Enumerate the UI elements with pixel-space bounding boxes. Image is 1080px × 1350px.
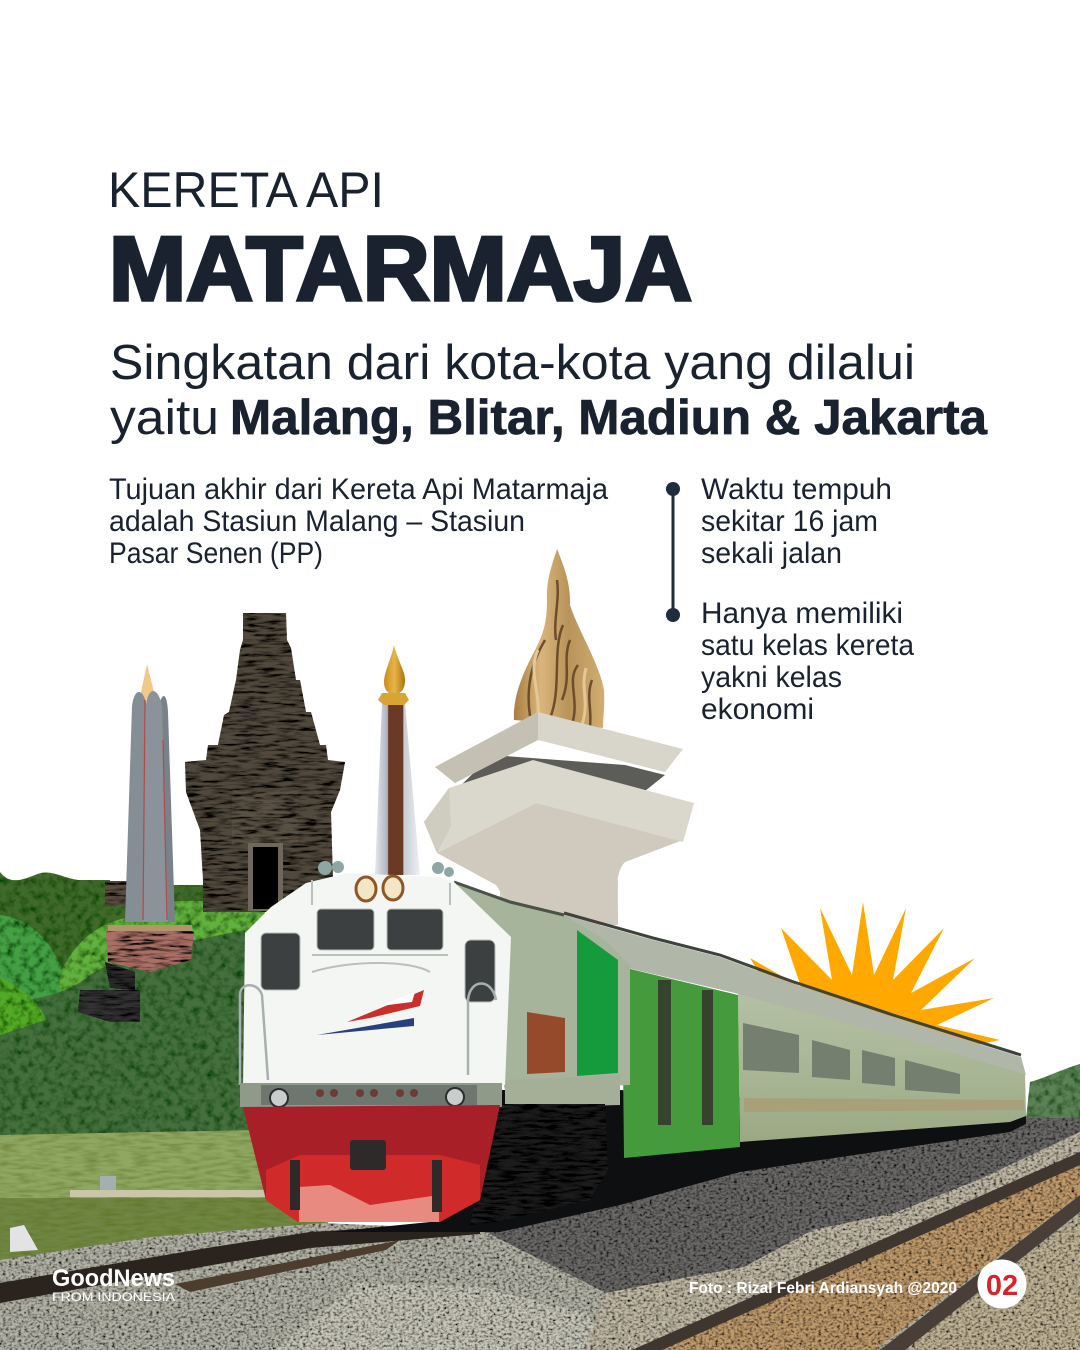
carriage stripe (744, 1098, 1024, 1112)
subtitle text block: yaitu (110, 391, 219, 445)
light ballast (585, 1132, 1080, 1350)
carriage doors (658, 980, 713, 1125)
text block: travel time: sekali jalan (701, 537, 842, 570)
forest hills left (0, 872, 265, 1150)
text block: class: Hanya memiliki (701, 597, 903, 630)
roof edge (564, 913, 1021, 1055)
monument: candi temple (185, 613, 345, 912)
bogies (470, 1104, 608, 1225)
monument: monas (375, 645, 420, 875)
distant hill right (1025, 1064, 1080, 1128)
heading: Kereta Api: KERETA API (108, 162, 384, 218)
text block: travel time (701, 473, 892, 570)
sunburst (750, 902, 1000, 1060)
monument: twin towers (78, 664, 194, 1022)
text block: destination: Tujuan akhir dari Kereta Api Matarmaja (109, 473, 608, 506)
subtitle text block (110, 336, 988, 445)
lamp band (240, 1083, 502, 1107)
silver carriages (738, 993, 1026, 1142)
track bed between rails (660, 1160, 1080, 1350)
undercarriage (330, 1090, 1026, 1232)
green carriage (622, 967, 740, 1158)
subtitle text block: Singkatan dari kota-kota yang dilalui (110, 336, 915, 390)
coupler (290, 1140, 442, 1212)
rails (0, 1152, 1080, 1350)
text block: destination: adalah Stasiun Malang – Stasiun (109, 505, 525, 538)
heading: Matarmaja: MATARMAJA (109, 219, 692, 320)
text block: destination: Pasar Senen (PP) (109, 537, 323, 570)
white body (243, 873, 511, 1088)
logo: goodnews: GoodNews (52, 1265, 175, 1292)
text block: class: ekonomi (701, 693, 814, 726)
roof (564, 915, 1026, 1075)
text block: class (701, 597, 914, 726)
right ballast (900, 1215, 1080, 1350)
page number (978, 1260, 1026, 1308)
logo swoosh (317, 990, 424, 1035)
plow (299, 1185, 439, 1222)
text block: destination (109, 473, 608, 570)
monument: tugu nasional (424, 549, 694, 925)
headlights (356, 876, 403, 901)
bumper lamps (270, 1088, 464, 1107)
handrails (240, 984, 496, 1085)
shadowed gravel under train (482, 1118, 1080, 1293)
field path and figures (10, 1176, 265, 1252)
text block: class: yakni kelas (701, 661, 842, 694)
text block: travel time: sekitar 16 jam (701, 505, 878, 538)
locomotive front (240, 861, 511, 1222)
front windows (261, 909, 495, 1002)
field (0, 1130, 330, 1262)
red front (243, 1105, 500, 1222)
subtitle text block: Malang, Blitar, Madiun & Jakarta (230, 391, 988, 445)
passenger carriages (330, 913, 1026, 1232)
horns (318, 861, 454, 877)
text block: travel time: Waktu tempuh (701, 473, 892, 506)
ground gravel (0, 1118, 1080, 1350)
page number: 02 (986, 1270, 1018, 1302)
logo: goodnews (52, 1265, 175, 1304)
text block: class: satu kelas kereta (701, 629, 914, 662)
carriage windows (743, 1023, 960, 1094)
lighter gravel mound (275, 1283, 620, 1350)
photo credit: Foto : Rizal Febri Ardiansyah @2020 (689, 1280, 957, 1297)
face trim lines (312, 880, 450, 972)
logo: goodnews: FROM INDONESIA (52, 1290, 175, 1304)
timeline markers (666, 482, 680, 622)
locomotive hood (454, 882, 630, 1108)
